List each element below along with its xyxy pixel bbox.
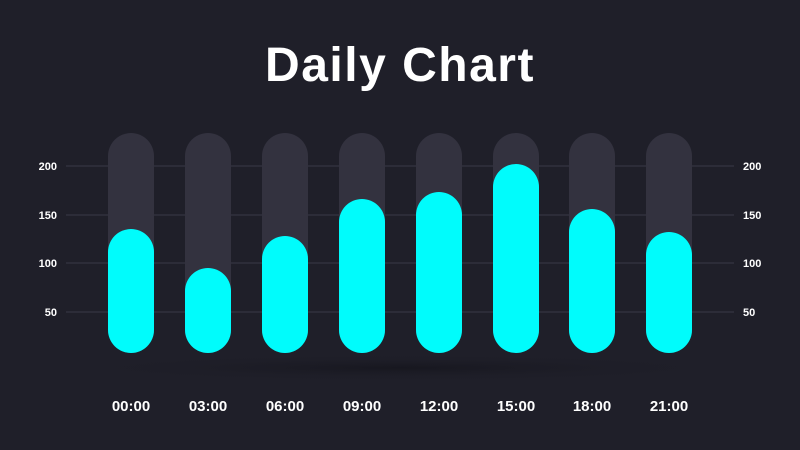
axis labels: left: 50 <box>45 307 57 319</box>
axis labels: right: 100 <box>743 258 761 270</box>
axis labels: right: 150 <box>743 210 761 222</box>
time labels: 18:00 <box>573 398 611 415</box>
background tracks <box>108 133 692 353</box>
axis labels: right: 200 <box>743 161 761 173</box>
time labels: 21:00 <box>650 398 688 415</box>
time labels: 00:00 <box>112 398 150 415</box>
time labels: 15:00 <box>497 398 535 415</box>
title: Daily Chart <box>265 39 535 92</box>
axis labels: right: 50 <box>743 307 755 319</box>
axis labels: right <box>743 161 761 319</box>
time labels: 12:00 <box>420 398 458 415</box>
axis labels: left: 100 <box>39 258 57 270</box>
axis labels: left: 150 <box>39 210 57 222</box>
time labels: 09:00 <box>343 398 381 415</box>
axis labels: left <box>39 161 57 319</box>
bars <box>108 164 692 353</box>
time labels <box>112 398 688 415</box>
time labels: 03:00 <box>189 398 227 415</box>
axis labels: left: 200 <box>39 161 57 173</box>
time labels: 06:00 <box>266 398 304 415</box>
